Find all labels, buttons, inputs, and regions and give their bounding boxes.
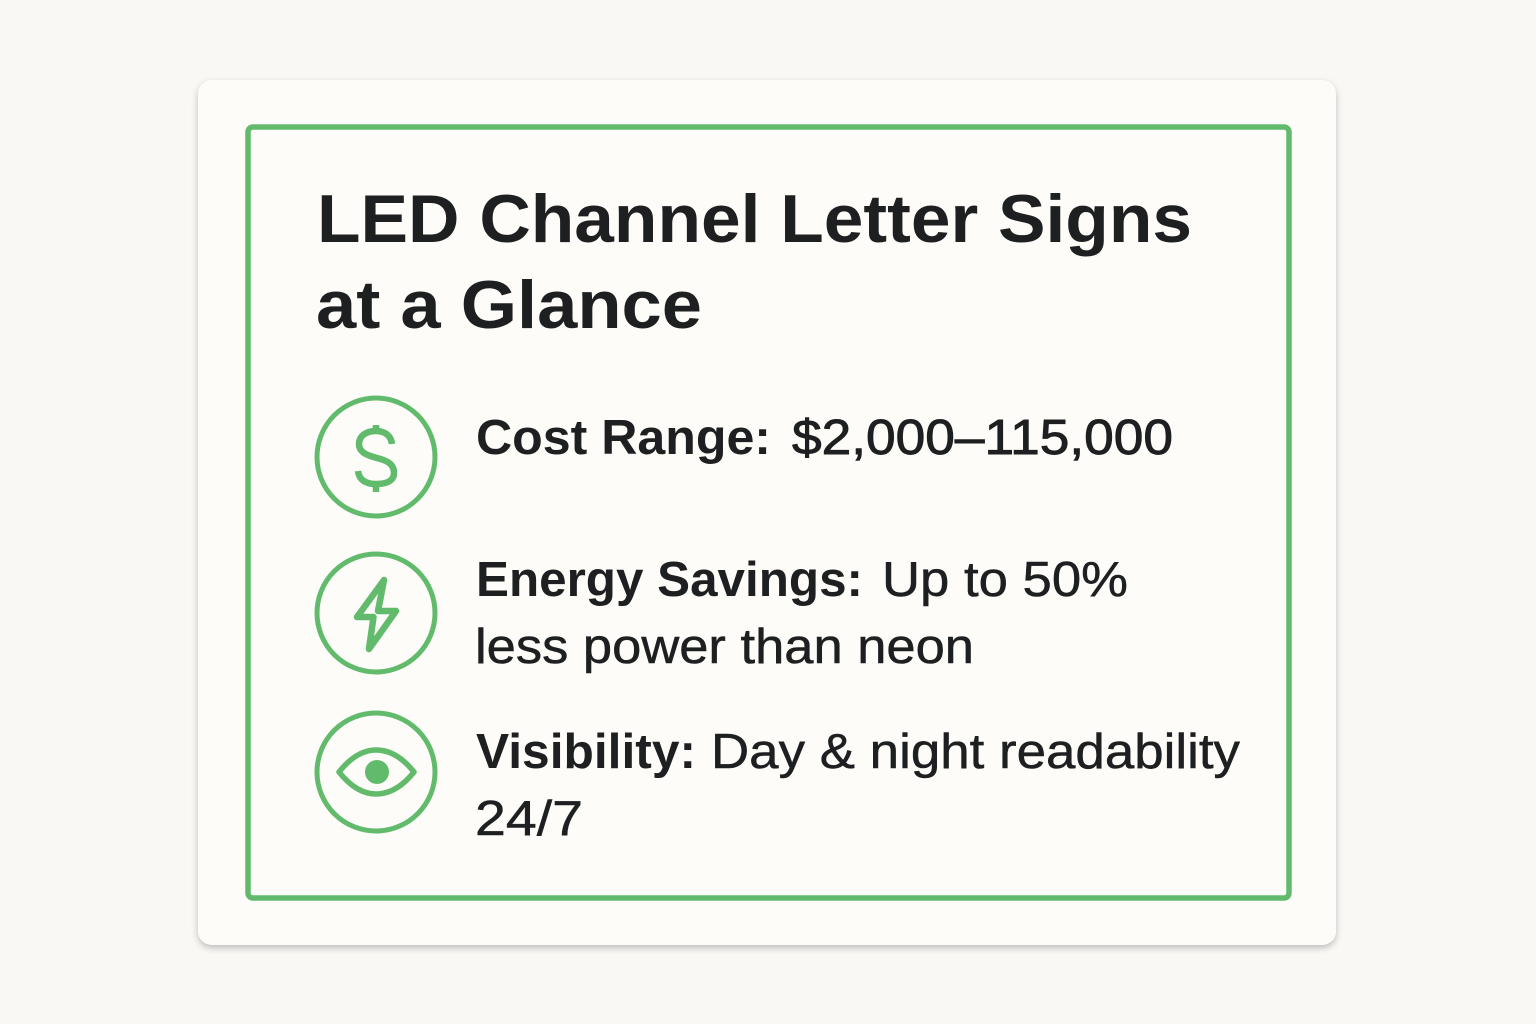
visibility text: Visibility: [476, 725, 696, 779]
title: LED Channel Letter Signs [317, 181, 1192, 257]
icon: lightning bolt [317, 554, 435, 672]
energy savings text [475, 553, 1128, 674]
cost range text: $2,000–115,000 [792, 411, 1173, 465]
energy savings text: Energy Savings: [476, 553, 863, 607]
title [316, 181, 1192, 343]
energy savings text: less power than neon [475, 620, 974, 674]
cost range text [476, 411, 1173, 465]
icon: eye [317, 713, 435, 831]
cost range text: Cost Range: [476, 411, 771, 465]
visibility text [475, 725, 1241, 846]
row: energy savings [317, 553, 1128, 674]
row: cost range [317, 398, 1173, 516]
visibility text: Day & night readability [711, 725, 1241, 779]
energy savings text: Up to 50% [882, 553, 1128, 607]
row: visibility [317, 713, 1241, 846]
icon: dollar sign [317, 398, 435, 516]
title: at a Glance [316, 267, 702, 343]
panel: green border frame [248, 127, 1289, 898]
panel: card [198, 80, 1336, 945]
visibility text: 24/7 [475, 792, 583, 846]
